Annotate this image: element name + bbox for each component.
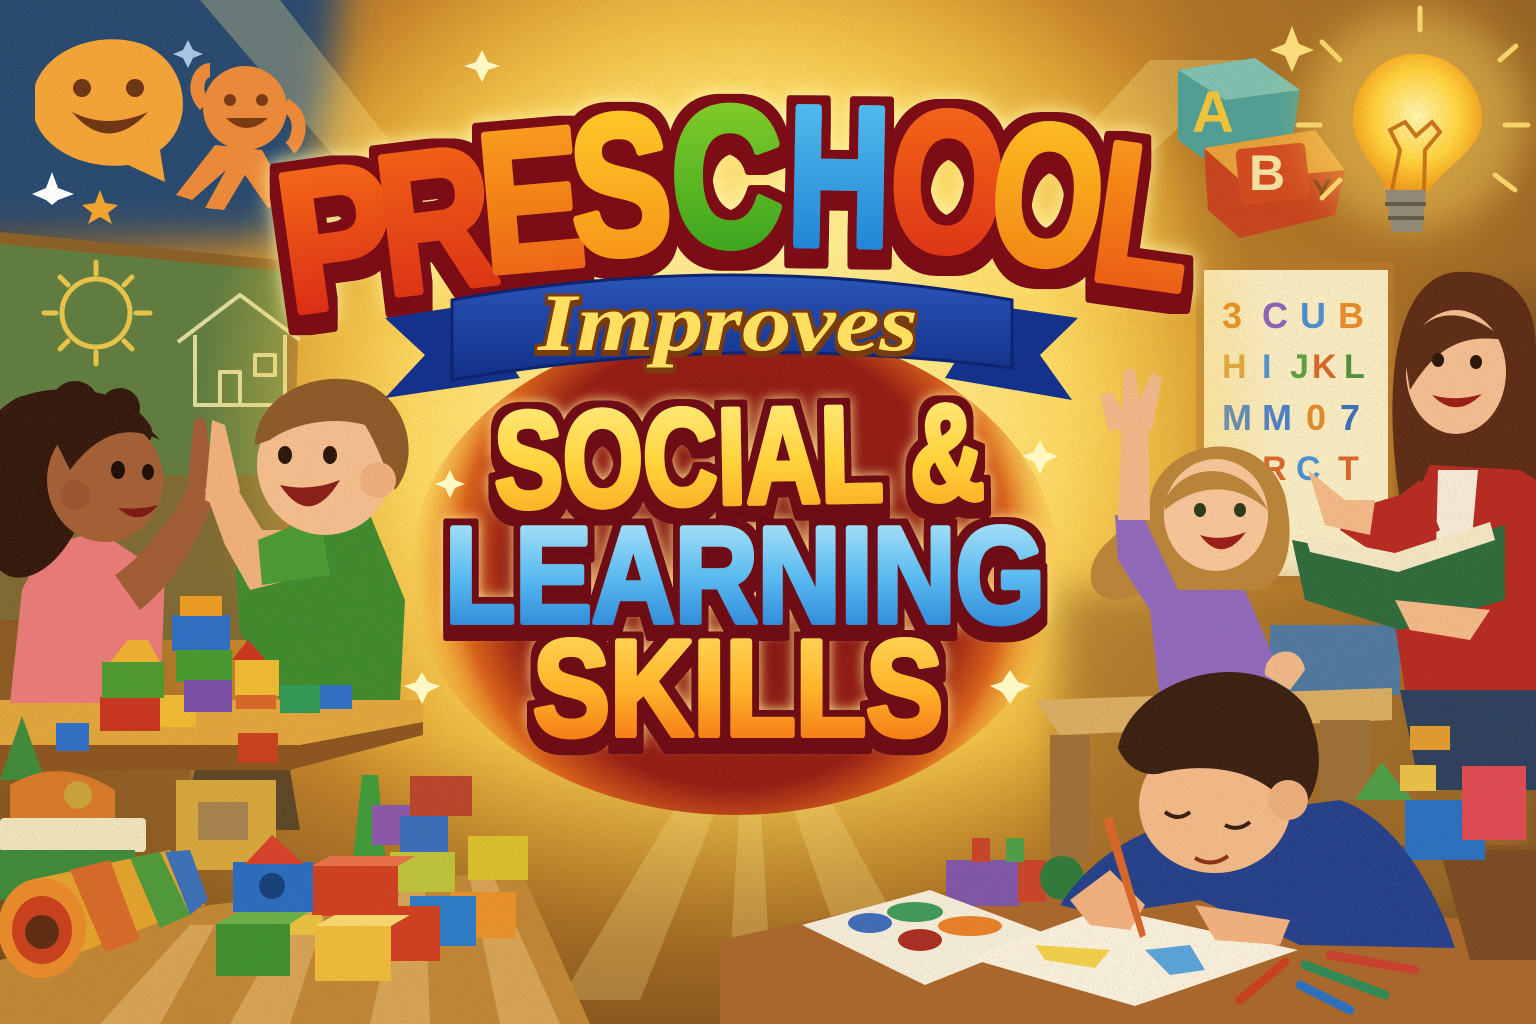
title: PRESCHOOL: L bbox=[1081, 100, 1208, 332]
floor and back of classroom bbox=[0, 590, 1536, 1024]
alphabet chart on the wall: M bbox=[1262, 397, 1292, 438]
blocks on the right bbox=[946, 726, 1536, 960]
ribbon banner bbox=[385, 275, 1078, 400]
alphabet chart on the wall: J bbox=[1290, 348, 1309, 386]
decorative sparkles bbox=[404, 26, 1314, 704]
word: Skills: SKILLS bbox=[533, 612, 943, 764]
alphabet chart on the wall: T bbox=[1338, 450, 1359, 488]
icon: stars top left bbox=[32, 40, 203, 224]
drawing paper bbox=[968, 908, 1298, 1006]
icon: smiling speech bubble bbox=[35, 39, 183, 182]
art paper with shapes bbox=[802, 890, 1050, 985]
word: Learning: LEARNING bbox=[445, 499, 1045, 651]
striped wooden play table bbox=[0, 868, 590, 1024]
teacher with open book bbox=[1308, 272, 1536, 790]
alphabet chart on the wall: 7 bbox=[1340, 397, 1360, 438]
title: PRESCHOOL: O bbox=[983, 80, 1113, 310]
headline: Social & Learning Skills bbox=[445, 376, 1045, 764]
title: PRESCHOOL: P bbox=[265, 121, 408, 355]
child: girl raising her hand bbox=[1091, 368, 1305, 700]
title: PRESCHOOL: H bbox=[786, 65, 893, 288]
alphabet chart on the wall: 0 bbox=[1306, 397, 1326, 438]
toys: shelf with arch block, toy box and cone bbox=[0, 716, 276, 900]
title: PRESCHOOL bbox=[265, 65, 1208, 355]
alphabet chart on the wall: U bbox=[1300, 295, 1326, 336]
toy: striped rolling cylinder bbox=[0, 850, 208, 978]
icon: orange child figure bbox=[176, 66, 299, 210]
icon: alphabet blocks A and B: Y bbox=[1312, 174, 1332, 207]
left table bbox=[0, 620, 423, 880]
alphabet chart on the wall: H bbox=[1222, 348, 1247, 386]
chalk house bbox=[178, 295, 300, 405]
icon: glowing light bulb bbox=[1298, 8, 1528, 232]
title: PRESCHOOL: S bbox=[565, 73, 676, 298]
alphabet chart on the wall: K bbox=[1312, 348, 1337, 386]
icon: alphabet blocks A and B: B bbox=[1249, 145, 1285, 201]
building blocks on the play table bbox=[216, 775, 528, 981]
icon: alphabet blocks A and B: A bbox=[1192, 80, 1234, 145]
title: PRESCHOOL: O bbox=[885, 68, 1010, 295]
icon: alphabet blocks A and B bbox=[1178, 58, 1345, 238]
child: curly haired girl high-fiving bbox=[0, 381, 218, 703]
alphabet chart on the wall: P bbox=[1262, 500, 1285, 538]
child: boy in green shirt high-fiving bbox=[205, 379, 409, 700]
chalkboard with sun and house drawing bbox=[0, 232, 300, 640]
title: PRESCHOOL: R bbox=[365, 103, 506, 337]
banner word: Improves bbox=[537, 277, 918, 368]
alphabet chart on the wall: C bbox=[1296, 450, 1321, 488]
blocks on the left table bbox=[56, 596, 352, 763]
alphabet chart on the wall: C bbox=[1262, 295, 1288, 336]
word: Social &: SOCIAL & bbox=[493, 376, 985, 536]
title: PRESCHOOL: C bbox=[669, 65, 784, 288]
crayons on the table bbox=[1240, 955, 1415, 1010]
alphabet chart on the wall: R bbox=[1262, 450, 1287, 488]
central red burst bbox=[410, 325, 1060, 815]
child: boy drawing with pencil bbox=[1060, 672, 1455, 948]
background desk on the right bbox=[1035, 688, 1392, 860]
chalk sun bbox=[44, 262, 150, 364]
alphabet chart on the wall: L bbox=[1344, 348, 1365, 386]
alphabet chart on the wall: B bbox=[1338, 295, 1364, 336]
open green book bbox=[1292, 522, 1505, 640]
right foreground table bbox=[720, 880, 1536, 1024]
alphabet chart on the wall: I bbox=[1262, 348, 1271, 386]
alphabet chart on the wall bbox=[1196, 262, 1394, 584]
title: PRESCHOOL: E bbox=[470, 85, 592, 315]
alphabet chart on the wall: 3 bbox=[1222, 295, 1242, 336]
alphabet chart on the wall: M bbox=[1222, 397, 1252, 438]
